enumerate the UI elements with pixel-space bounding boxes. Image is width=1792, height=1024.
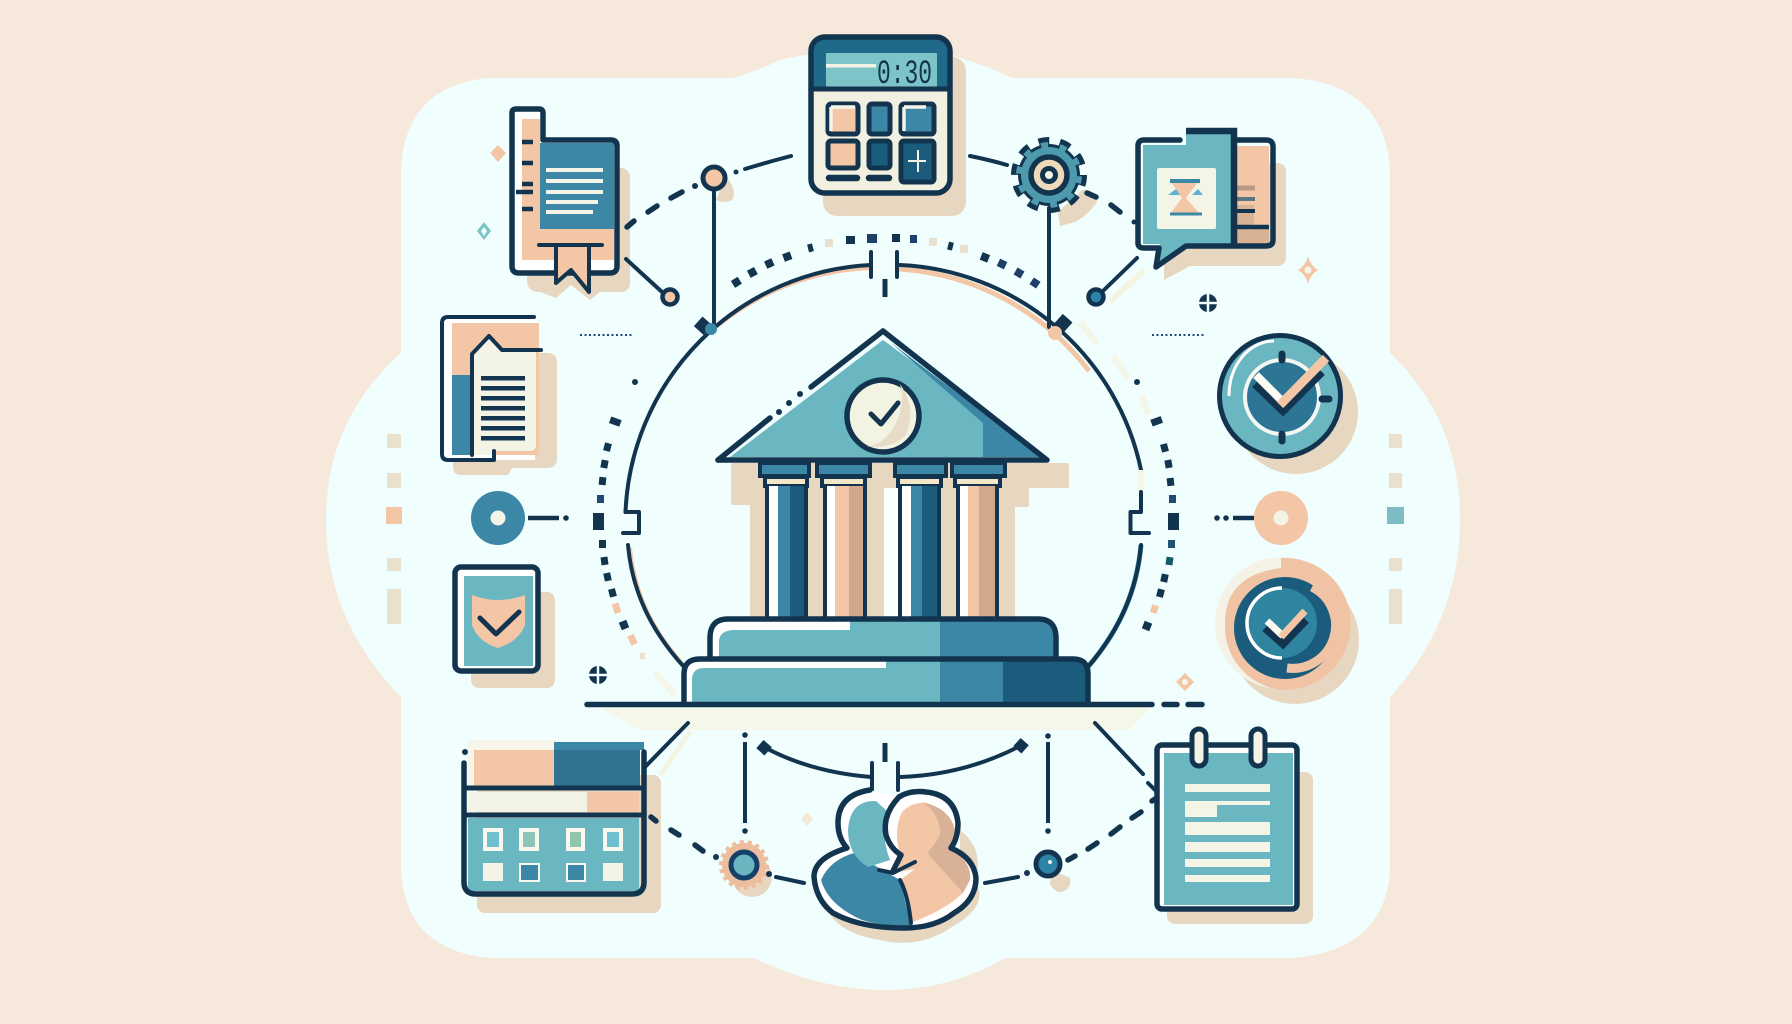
lower arc with brackets bbox=[756, 738, 1029, 826]
dashed outer ring bbox=[593, 234, 1179, 695]
icon: clock with check bbox=[1220, 336, 1358, 474]
icon: teal node left bbox=[471, 491, 569, 545]
pin line lower left bbox=[742, 732, 748, 834]
icon: calendar panel bbox=[462, 723, 690, 913]
connector: speech folder node bbox=[1088, 220, 1144, 304]
calculator display reading: 0:30 bbox=[877, 56, 932, 94]
icon: speech folder document bbox=[1138, 131, 1286, 280]
icon: circular check badge bbox=[1215, 557, 1359, 704]
icon: bank building bbox=[684, 331, 1088, 703]
small dotted accents bbox=[580, 334, 1205, 336]
seal with check mark bbox=[847, 380, 919, 452]
icon: document stack bbox=[442, 317, 557, 475]
icon: calculator bbox=[811, 37, 966, 216]
connector: small gear to people bbox=[766, 871, 804, 883]
connector: calendar dashes bbox=[651, 817, 719, 860]
sparkle right bbox=[1298, 256, 1318, 284]
soft glow under the base bbox=[600, 708, 1150, 730]
person: peach bbox=[897, 802, 970, 922]
sparkle lower right bbox=[1176, 673, 1194, 691]
connector: notepad dashes bbox=[1068, 723, 1155, 860]
icon: shield card bbox=[455, 567, 555, 688]
person: teal bbox=[821, 801, 911, 925]
crosshair top right bbox=[1199, 294, 1217, 312]
columns bbox=[760, 463, 1005, 619]
side markers right bbox=[1387, 434, 1404, 624]
sparkles top left bbox=[477, 145, 506, 240]
building shadow bbox=[733, 465, 1067, 618]
icon: notepad bbox=[1157, 729, 1313, 924]
hourglass glyph bbox=[1168, 181, 1203, 214]
pin line lower right bbox=[1045, 733, 1051, 834]
icon: peach node right bbox=[1214, 491, 1308, 545]
plinth bbox=[684, 619, 1088, 703]
panel: central light backdrop bbox=[326, 50, 1460, 990]
ground line bbox=[587, 702, 1202, 707]
connector: book node bbox=[626, 259, 678, 304]
connector: calculator to pin bbox=[627, 156, 791, 335]
icon: gear with connector bbox=[970, 142, 1136, 340]
icon: small peach gear bbox=[721, 842, 772, 897]
connector: people to node bbox=[985, 870, 1030, 883]
icon: two people bbox=[814, 790, 980, 943]
pediment bbox=[718, 331, 1047, 460]
side markers left bbox=[386, 434, 402, 624]
icon: book with bookmark bbox=[512, 109, 630, 300]
crosshair lower left bbox=[589, 666, 607, 684]
central circle frame bbox=[623, 252, 1149, 670]
icon: lower right node bbox=[1036, 852, 1070, 892]
